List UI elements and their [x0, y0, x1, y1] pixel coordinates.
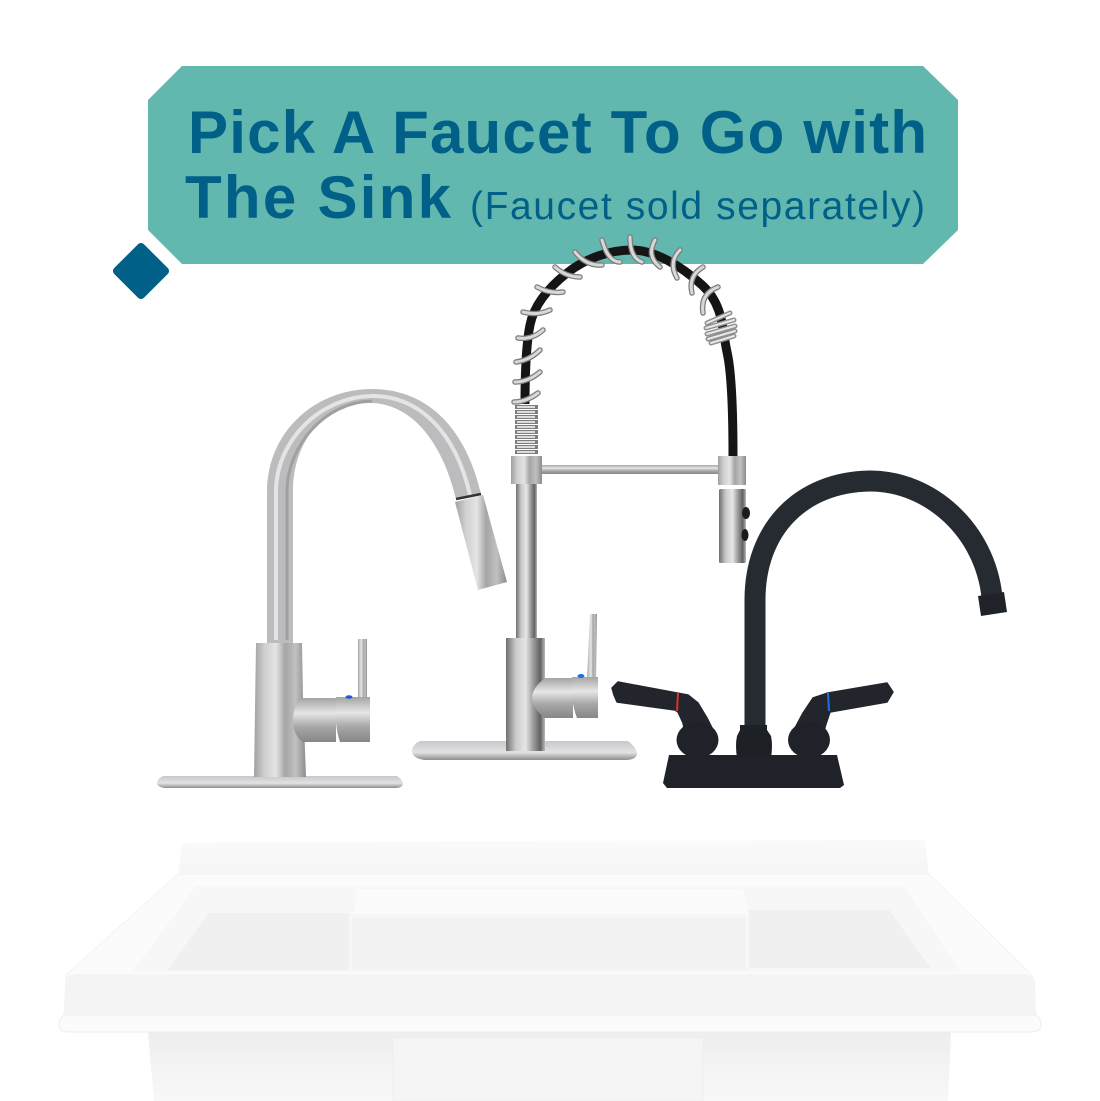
sink lower lip [59, 1015, 1041, 1032]
handle head [572, 677, 598, 718]
mounting plate [157, 776, 403, 788]
basin centre shelf [354, 889, 748, 914]
faucet body [506, 638, 545, 751]
sink basin recess [132, 886, 960, 972]
gooseneck highlight [276, 396, 470, 640]
base spring [515, 407, 538, 452]
sink top rim [64, 874, 1036, 1016]
banner heading [185, 99, 927, 231]
faucet: brushed pull-down [157, 389, 507, 788]
basin centre wall [352, 918, 746, 970]
basin left wall [167, 913, 349, 970]
tight coil near hose end [706, 313, 735, 343]
gooseneck [267, 389, 481, 645]
heading line one: Pick A Faucet To Go with [188, 99, 927, 166]
left handle [612, 682, 712, 728]
centre nut [736, 725, 772, 758]
spring coil shadow [514, 237, 718, 402]
spray button lower [742, 529, 748, 541]
crossbar [541, 465, 719, 474]
faucet body [254, 643, 306, 777]
handle head [336, 697, 370, 742]
blue cold band [828, 693, 829, 711]
red hot band [677, 693, 678, 711]
handle lever [358, 639, 367, 699]
right coupler [718, 456, 746, 485]
handle cylinder [293, 698, 336, 742]
spring coil highlight [514, 237, 718, 402]
gooseneck spout [755, 481, 992, 735]
heading line two: The Sink [185, 164, 452, 231]
stem coupler [511, 456, 542, 484]
mounting plate [412, 741, 637, 760]
diamond accent [111, 241, 171, 301]
spray head [455, 495, 507, 590]
basin right wall [749, 910, 931, 968]
tight coil highlight [706, 313, 735, 343]
sink body [148, 1032, 951, 1101]
base plate [663, 755, 844, 788]
spout collar [978, 592, 1007, 616]
gooseneck shade [287, 401, 372, 640]
handle cylinder [532, 678, 573, 718]
hose [525, 250, 733, 456]
left handle ball [676, 722, 718, 758]
spray button upper [742, 507, 750, 519]
blue cold dot [578, 674, 584, 678]
faucet sold separately note: (Faucet sold separately) [470, 185, 925, 228]
sink backsplash [178, 840, 929, 878]
right handle [795, 683, 893, 728]
spray head [719, 489, 746, 563]
spray head ring [456, 494, 481, 499]
sink rim front band [64, 974, 1036, 1016]
stem [516, 482, 537, 640]
faucet: spring pre-rinse [412, 237, 750, 760]
sink front label panel [393, 1038, 703, 1101]
banner panel [148, 66, 958, 264]
faucet: matte black two-handle [612, 481, 1007, 788]
handle lever [587, 614, 597, 678]
blue cold dot [346, 695, 352, 699]
sink [59, 840, 1041, 1101]
right handle ball [788, 722, 830, 758]
